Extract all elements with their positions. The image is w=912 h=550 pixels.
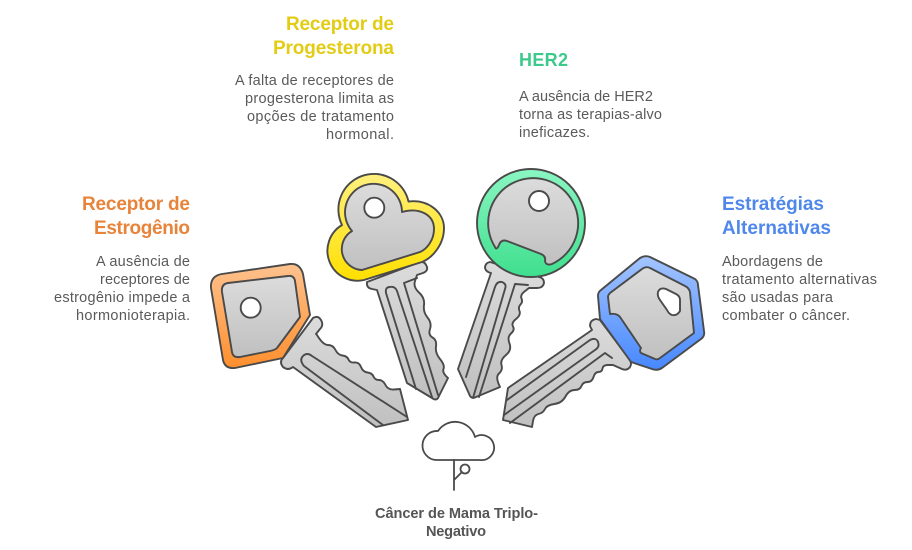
description: HER2: A ausência de HER2 [519,89,653,105]
description: Estratégias: combater o câncer. [722,308,850,324]
description: Estratégias: Abordagens de [722,254,823,270]
text block: Receptor de Estrogênio [54,194,191,324]
text block: HER2 [519,50,662,141]
label: Câncer de Mama Triplo-Negativo: Negativo [426,524,486,540]
description: Progesterona: A falta de receptores de [235,73,394,89]
heading: Estratégias Alternativas [722,194,831,239]
heading: Receptor de Progesterona [273,14,394,59]
description: Progesterona [235,73,394,143]
description: HER2 [519,89,662,141]
heading: Estratégias Alternativas: Estratégias [722,194,824,215]
description: Estrogênio: A ausência de [96,254,190,270]
description: HER2: ineficazes. [519,125,590,141]
description: Progesterona: opções de tratamento [247,109,394,125]
description: Estrogênio: receptores de [100,272,190,288]
icon: orange key [211,264,408,427]
heading: Receptor de Progesterona: Receptor de [286,14,394,35]
heading: Receptor de Estrogênio: Receptor de [82,194,190,215]
heading: Receptor de Estrogênio: Estrogênio [94,218,190,239]
text block: Estratégias Alternativas [722,194,877,324]
heading: Receptor de Progesterona: Progesterona [273,38,394,59]
icon: blue key [503,256,704,427]
description: Estrogênio: estrogênio impede a [54,290,191,306]
description: Progesterona: hormonal. [326,127,394,143]
description: Estratégias [722,254,877,324]
heading: Estratégias Alternativas: Alternativas [722,218,831,239]
description: Estrogênio: hormonioterapia. [76,308,190,324]
description: HER2: torna as terapias-alvo [519,107,662,123]
description: Progesterona: progesterona limita as [245,91,394,107]
icon: cloud tree [422,422,494,490]
label: Câncer de Mama Triplo-Negativo: Câncer de Mama Triplo- [375,506,538,522]
description: Estratégias: tratamento alternativas [722,272,877,288]
heading: HER2: HER2 [519,50,568,70]
text block: Receptor de Progesterona [235,14,394,143]
description: Estratégias: são usadas para [722,290,834,306]
icon: green key [458,169,585,398]
icon: yellow key [327,174,448,400]
description: Estrogênio [54,254,191,324]
label: Câncer de Mama Triplo-Negativo [375,506,538,540]
heading: Receptor de Estrogênio [82,194,190,239]
